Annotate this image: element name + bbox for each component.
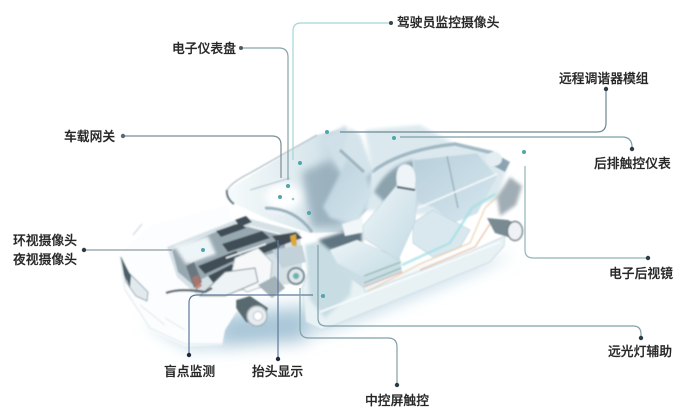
- ground shadow: [145, 255, 515, 350]
- callout: 中控屏触控: [300, 288, 429, 408]
- callout: 抬头显示: [252, 240, 303, 379]
- callout: 电子后视镜: 电子后视镜: [609, 266, 673, 281]
- callout: 驾驶员监控摄像头: [293, 15, 500, 160]
- rear axle and wheel: [487, 177, 522, 240]
- callout: 电子仪表盘: [172, 41, 288, 180]
- callout: 后排触控仪表: [400, 137, 671, 171]
- engine bay: [166, 216, 306, 298]
- callout: 环视摄像头 夜视摄像头: [13, 233, 172, 267]
- far front seat: [323, 128, 374, 236]
- interior roof and door panel: [365, 125, 510, 215]
- callout: 中控屏触控: 中控屏触控: [365, 393, 429, 408]
- car body: front bumper and hood: [120, 205, 250, 346]
- callout: 车载网关: [64, 129, 281, 178]
- car cutaway illustration: [120, 125, 522, 350]
- sensor location dots: [201, 130, 526, 298]
- callout: 抬头显示: 抬头显示: [252, 364, 303, 379]
- front seat: [330, 164, 417, 288]
- callout: 电子仪表盘: 电子仪表盘: [172, 41, 236, 56]
- callout: 远光灯辅助: 远光灯辅助: [608, 344, 672, 359]
- front wheel hub: [236, 296, 268, 326]
- callout: 盲点监测: [164, 295, 313, 379]
- windshield and dashboard: [227, 125, 372, 233]
- callout: 环视摄像头 夜视摄像头: 环视摄像头: [13, 233, 77, 248]
- callout: 环视摄像头 夜视摄像头: 夜视摄像头: [13, 252, 77, 267]
- headlight: [121, 257, 148, 301]
- rear seat: [413, 152, 502, 257]
- callout: 远程调谐器模组: [340, 71, 649, 132]
- callout: 盲点监测: 盲点监测: [164, 364, 215, 379]
- wiring harness: [368, 194, 497, 291]
- callout: 后排触控仪表: 后排触控仪表: [594, 156, 671, 171]
- callout: 车载网关: 车载网关: [64, 129, 115, 144]
- callout: 远程调谐器模组: 远程调谐器模组: [559, 71, 649, 86]
- callout: 驾驶员监控摄像头: 驾驶员监控摄像头: [397, 15, 500, 30]
- callout: 远光灯辅助: [318, 245, 672, 359]
- cabin floor: [302, 226, 505, 330]
- callout: 电子后视镜: [525, 166, 673, 281]
